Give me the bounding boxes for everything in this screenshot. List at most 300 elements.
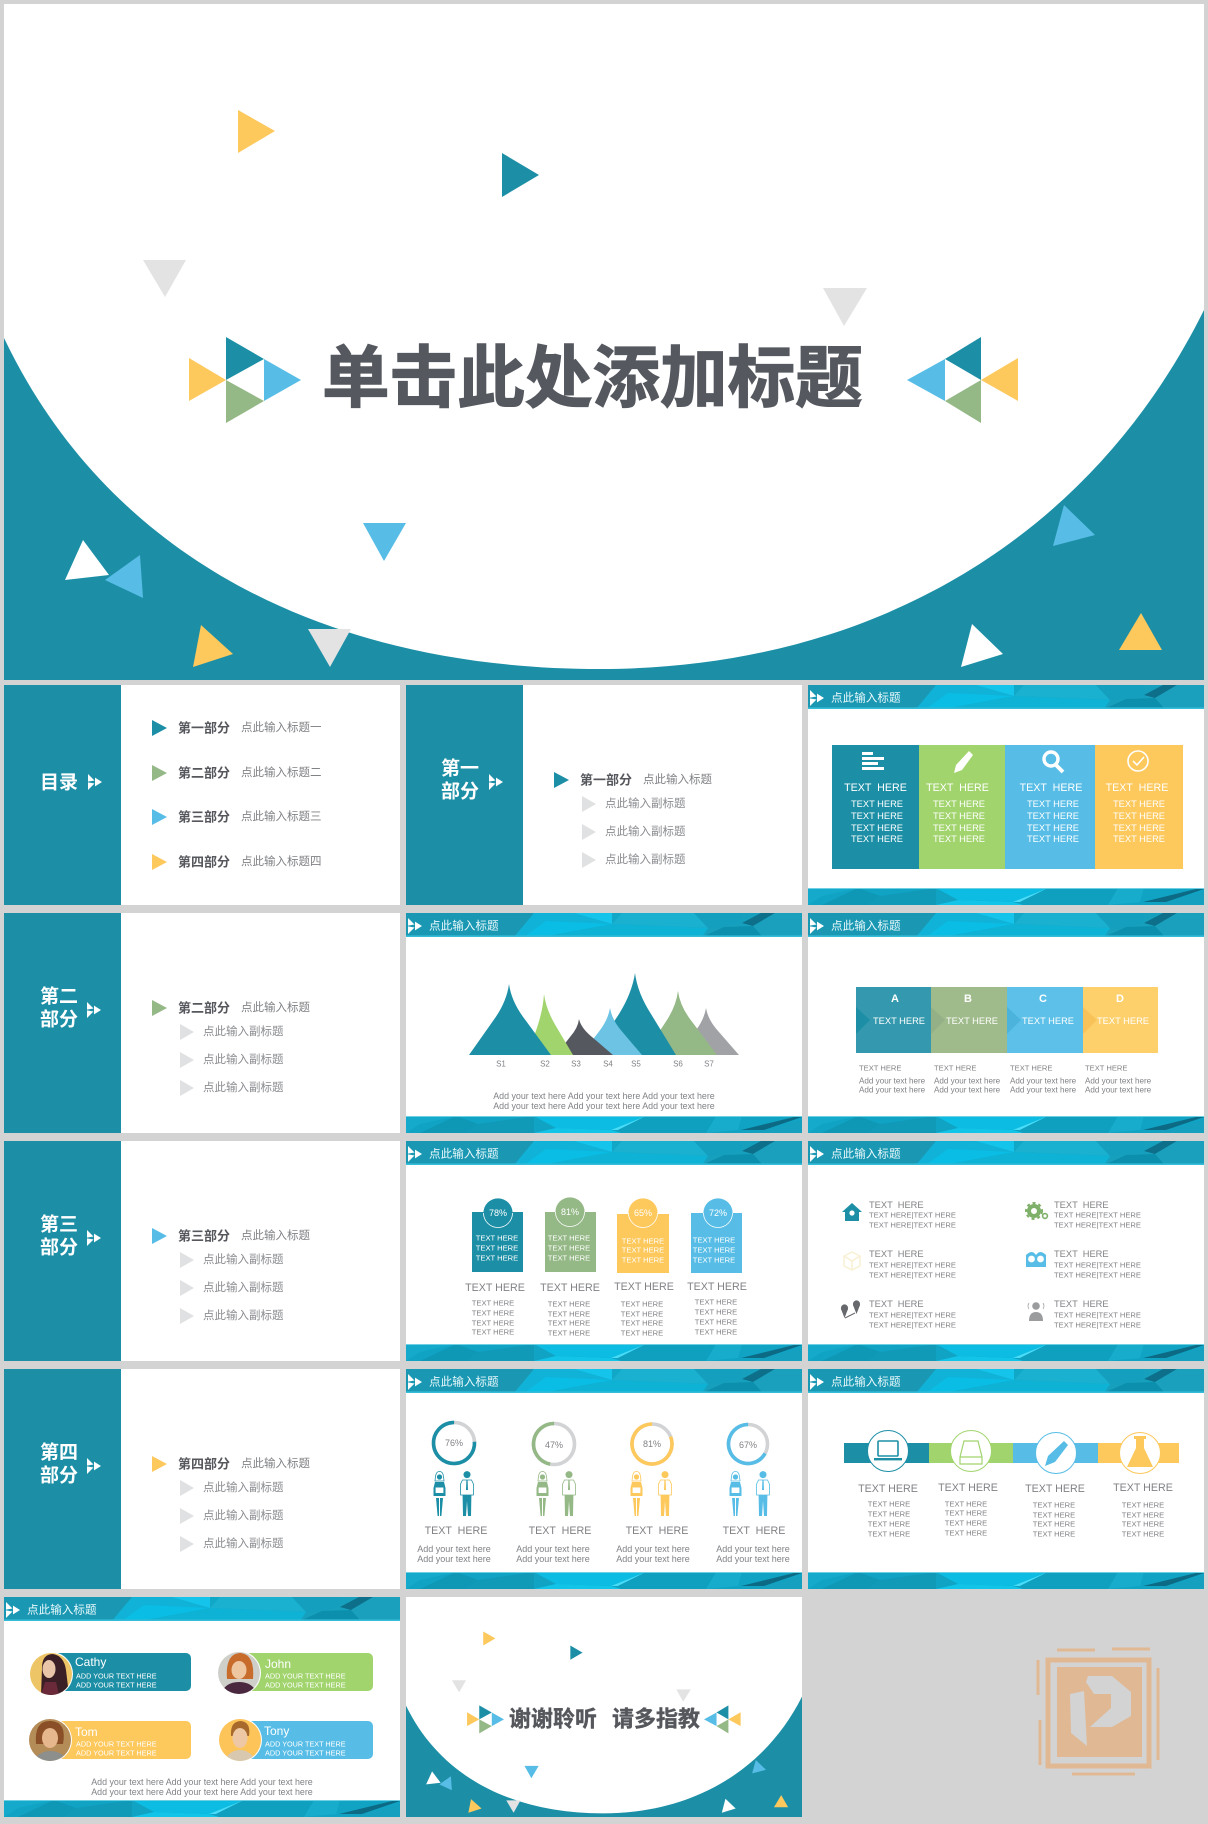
card: Tony: ADD YOUR TEXT HERE xyxy=(265,1740,346,1748)
header band xyxy=(808,1141,1204,1165)
slide background xyxy=(406,913,802,1133)
contents item 2 xyxy=(152,765,322,781)
subheading 1: 点此输入副标题 xyxy=(203,1252,284,1266)
subheading 2 xyxy=(180,1052,284,1068)
subheading 1: 点此输入副标题 xyxy=(203,1024,284,1038)
people icons yellow xyxy=(630,1471,671,1516)
icon: pencil xyxy=(1036,1432,1076,1474)
section heading: 点此输入标题 xyxy=(643,772,712,786)
section heading: 点此输入标题 xyxy=(241,1456,310,1470)
chart axis labels: S1 xyxy=(496,1060,506,1068)
header band xyxy=(406,1141,802,1165)
icon: person speaking xyxy=(1028,1302,1044,1321)
card: John: ADD YOUR TEXT HERE xyxy=(265,1672,346,1680)
avatar: John xyxy=(217,1651,261,1695)
item 3 text: TEXT HERE xyxy=(869,1249,924,1259)
sidebar: 部分 xyxy=(40,1236,78,1258)
description D: Add your text here xyxy=(1085,1086,1152,1094)
icon: cube xyxy=(844,1252,860,1270)
contents item 3: 点此输入标题三 xyxy=(241,809,322,823)
item 1 text: TEXT HERE|TEXT HERE xyxy=(869,1210,956,1220)
panel: four colour columns xyxy=(808,685,1204,905)
text column 1: TEXT HERE xyxy=(858,1483,918,1495)
header band: 点此输入标题 xyxy=(831,690,901,704)
subheading 1: 点此输入副标题 xyxy=(203,1480,284,1494)
section heading: 第四部分 xyxy=(178,1456,230,1472)
subheading 3 xyxy=(180,1308,284,1324)
chart axis labels: S5 xyxy=(631,1060,641,1068)
description A xyxy=(859,1064,926,1094)
column 3: TEXT HERE xyxy=(1027,799,1079,809)
icon: check circle xyxy=(1128,751,1148,771)
header band xyxy=(808,685,1204,709)
column 1: TEXT HERE xyxy=(844,782,907,794)
colour band xyxy=(844,1443,1179,1463)
text column 2: TEXT HERE xyxy=(548,1328,590,1338)
card 65%: TEXT HERE xyxy=(622,1256,664,1264)
card: Cathy xyxy=(29,1652,191,1696)
item 4 text: TEXT HERE|TEXT HERE xyxy=(1054,1270,1141,1280)
icon: flask xyxy=(1120,1432,1160,1474)
description B: Add your text here xyxy=(934,1086,1001,1094)
sidebar xyxy=(4,913,121,1133)
footer band xyxy=(406,1572,802,1589)
text column 1: TEXT HERE xyxy=(868,1510,910,1518)
text column 2: TEXT HERE xyxy=(945,1508,987,1518)
text column 2: TEXT HERE xyxy=(938,1482,998,1494)
footer band xyxy=(808,888,1204,905)
footer band xyxy=(808,1572,1204,1589)
panel: section three xyxy=(4,1141,400,1361)
people icons green xyxy=(536,1471,575,1516)
card: Tony: Tony xyxy=(264,1724,289,1738)
gauge 81% xyxy=(626,1418,678,1470)
text column 1: TEXT HERE xyxy=(472,1308,514,1318)
subheading 1: 点此输入副标题 xyxy=(605,796,686,810)
panel: timeline band xyxy=(808,1369,1204,1589)
panel: six icon list xyxy=(808,1141,1204,1361)
slide background xyxy=(808,685,1204,905)
column 1: TEXT HERE xyxy=(851,811,903,821)
sidebar: 第二 xyxy=(40,986,78,1008)
item 2 text: TEXT HERE|TEXT HERE xyxy=(1054,1210,1141,1220)
step B: B xyxy=(964,993,972,1005)
subheading 1 xyxy=(180,1252,284,1268)
step A: TEXT HERE xyxy=(873,1016,925,1026)
panel: contents slide xyxy=(4,685,400,905)
item 4 text: TEXT HERE xyxy=(1054,1249,1109,1259)
text column 4: TEXT HERE xyxy=(695,1308,737,1316)
section heading: 第三部分 xyxy=(178,1228,230,1244)
card 78%: TEXT HERE xyxy=(476,1254,518,1262)
text column 2 xyxy=(516,1525,591,1564)
header band: 点此输入标题 xyxy=(27,1602,97,1616)
text column 2: TEXT HERE xyxy=(945,1528,987,1538)
sidebar xyxy=(4,1369,121,1589)
caption: Add your text here Add your text here Add your text here xyxy=(493,1091,715,1101)
contents item 3: 第三部分 xyxy=(178,810,230,824)
footer band xyxy=(406,1344,802,1361)
description A: Add your text here xyxy=(859,1076,926,1086)
caption: Add your text here Add your text here Add your text here xyxy=(91,1787,313,1797)
contents item 1: 第一部分 xyxy=(178,720,230,736)
chart axis labels: S3 xyxy=(571,1060,581,1068)
text column 2: TEXT HERE xyxy=(945,1518,987,1528)
text column 4: TEXT HERE xyxy=(695,1318,737,1326)
text column 1 xyxy=(417,1525,491,1564)
text column 4 xyxy=(1113,1482,1173,1538)
chart axis labels: S2 xyxy=(540,1060,550,1068)
subheading 3 xyxy=(180,1536,284,1552)
gauge 76% xyxy=(432,1421,476,1465)
column 4: TEXT HERE xyxy=(1113,823,1165,833)
header band xyxy=(4,1597,400,1621)
text column 1: TEXT HERE xyxy=(472,1298,514,1308)
item 4 text xyxy=(1054,1249,1141,1280)
description B: TEXT HERE xyxy=(934,1064,976,1072)
item 4 text: TEXT HERE|TEXT HERE xyxy=(1054,1260,1141,1270)
text column 3: Add your text here xyxy=(616,1544,690,1554)
slide background xyxy=(4,1369,400,1589)
subheading 3: 点此输入副标题 xyxy=(203,1080,284,1094)
subheading 3: 点此输入副标题 xyxy=(203,1536,284,1550)
description A: Add your text here xyxy=(859,1086,926,1094)
card 78%: TEXT HERE xyxy=(476,1244,518,1252)
item 3 text xyxy=(869,1249,956,1280)
contents item 4 xyxy=(152,854,322,870)
text column 1: TEXT HERE xyxy=(868,1500,910,1508)
text column 4: TEXT HERE xyxy=(1122,1530,1164,1538)
column 3: TEXT HERE xyxy=(1027,811,1079,821)
panel: team xyxy=(4,1597,400,1817)
panel: peak chart xyxy=(406,913,802,1133)
text column 1 xyxy=(465,1282,525,1336)
column 2 xyxy=(919,745,1005,869)
sidebar: 第四 xyxy=(40,1442,78,1464)
text column 3 xyxy=(614,1281,674,1338)
watermark stamp xyxy=(1038,1649,1158,1774)
item 5 text: TEXT HERE|TEXT HERE xyxy=(869,1320,956,1330)
header band: 点此输入标题 xyxy=(429,1374,499,1388)
card: Tom: ADD YOUR TEXT HERE xyxy=(76,1740,157,1748)
text column 1: Add your text here xyxy=(417,1544,491,1554)
card 78%: 78% xyxy=(489,1208,507,1218)
sidebar: 第三 xyxy=(40,1214,78,1236)
text column 3 xyxy=(1025,1483,1085,1538)
thank you title xyxy=(509,1706,700,1732)
item 6 text: TEXT HERE xyxy=(1054,1299,1109,1309)
chart axis labels: S6 xyxy=(673,1060,683,1068)
column 1: TEXT HERE xyxy=(851,834,903,844)
sidebar xyxy=(406,685,523,905)
text column 3 xyxy=(616,1525,690,1564)
text column 2: TEXT HERE xyxy=(548,1318,590,1328)
header band: 点此输入标题 xyxy=(429,1146,499,1160)
text column 4: TEXT HERE xyxy=(1113,1482,1173,1494)
people icons teal xyxy=(434,1471,473,1516)
step C xyxy=(1007,987,1083,1053)
sidebar: 部分 xyxy=(40,1464,78,1486)
contents item 1 xyxy=(152,720,322,736)
subheading 2: 点此输入副标题 xyxy=(203,1052,284,1066)
card: Cathy: ADD YOUR TEXT HERE xyxy=(76,1680,157,1690)
subheading 1 xyxy=(180,1480,284,1496)
thank you title: 谢谢聆听 xyxy=(509,1706,597,1732)
subheading 2: 点此输入副标题 xyxy=(203,1280,284,1294)
gauge 67%: 67% xyxy=(739,1440,757,1450)
header band: 点此输入标题 xyxy=(429,918,499,932)
item 1 text: TEXT HERE|TEXT HERE xyxy=(869,1220,956,1230)
gauge 81%: 81% xyxy=(643,1439,661,1449)
card 78%: TEXT HERE xyxy=(476,1234,518,1242)
thank you title: 请多指教 xyxy=(612,1706,700,1732)
card 72%: 72% xyxy=(709,1208,727,1218)
description C: Add your text here xyxy=(1010,1076,1077,1086)
slide background xyxy=(808,1369,1204,1589)
item 6 text: TEXT HERE|TEXT HERE xyxy=(1054,1320,1141,1330)
section heading: 点此输入标题 xyxy=(241,1228,310,1242)
footer band xyxy=(4,1800,400,1817)
text column 2: Add your text here xyxy=(516,1544,590,1554)
panel: section one xyxy=(406,685,802,905)
column 4 xyxy=(1095,745,1183,869)
step B: TEXT HERE xyxy=(946,1016,998,1026)
section heading: 点此输入标题 xyxy=(241,1000,310,1014)
subheading 2 xyxy=(180,1508,284,1524)
text column 1: TEXT HERE xyxy=(472,1318,514,1328)
text column 2: TEXT HERE xyxy=(548,1300,590,1308)
contents item 1: 点此输入标题一 xyxy=(241,720,322,734)
slide background xyxy=(406,685,802,905)
text column 3: TEXT HERE xyxy=(621,1328,663,1338)
item 5 text xyxy=(869,1299,956,1330)
text column 4: TEXT HERE xyxy=(723,1525,785,1537)
subheading 2 xyxy=(582,824,686,840)
text column 1: TEXT HERE xyxy=(868,1530,910,1538)
description B: Add your text here xyxy=(934,1076,1001,1086)
description A: TEXT HERE xyxy=(859,1064,901,1072)
panel: percentage cards xyxy=(406,1141,802,1361)
card: Cathy: Cathy xyxy=(75,1655,106,1669)
panel: section two xyxy=(4,913,400,1133)
caption: Add your text here Add your text here Add your text here xyxy=(91,1777,313,1787)
section heading xyxy=(152,1228,310,1244)
panel: section four xyxy=(4,1369,400,1589)
text column 4: TEXT HERE xyxy=(695,1328,737,1336)
text column 2: TEXT HERE xyxy=(529,1525,591,1537)
card: John xyxy=(217,1651,373,1695)
subheading 2: 点此输入副标题 xyxy=(605,824,686,838)
item 3 text: TEXT HERE|TEXT HERE xyxy=(869,1260,956,1270)
card: Tom: ADD YOUR TEXT HERE xyxy=(76,1748,157,1758)
description C: Add your text here xyxy=(1010,1086,1077,1094)
text column 1: TEXT HERE xyxy=(472,1328,514,1336)
avatar: Tony xyxy=(218,1718,262,1762)
card 72%: TEXT HERE xyxy=(693,1236,735,1244)
card 72% xyxy=(691,1198,742,1273)
text column 3: TEXT HERE xyxy=(614,1281,674,1293)
subheading 3 xyxy=(180,1080,284,1096)
sidebar: 部分 xyxy=(40,1008,78,1030)
card 78% xyxy=(472,1198,523,1272)
sidebar: 目录 xyxy=(40,772,78,794)
text column 4: Add your text here xyxy=(716,1544,790,1554)
avatar: Tom xyxy=(28,1718,72,1762)
icon: gears xyxy=(1026,1203,1047,1219)
sidebar: 部分 xyxy=(441,780,479,802)
header band: 点此输入标题 xyxy=(831,918,901,932)
description C: TEXT HERE xyxy=(1010,1064,1052,1072)
contents item 4: 点此输入标题四 xyxy=(241,854,322,868)
text column 4 xyxy=(687,1281,747,1336)
panel: ring gauges with people xyxy=(406,1369,802,1589)
subheading 1 xyxy=(180,1024,284,1040)
header band xyxy=(406,1369,802,1393)
card 81%: TEXT HERE xyxy=(548,1244,590,1252)
card 65% xyxy=(617,1198,669,1273)
item 3 text: TEXT HERE|TEXT HERE xyxy=(869,1270,956,1280)
header band xyxy=(808,913,1204,937)
step C: TEXT HERE xyxy=(1022,1016,1074,1026)
text column 2 xyxy=(540,1282,600,1338)
column 2: TEXT HERE xyxy=(926,782,989,794)
text column 3: TEXT HERE xyxy=(1025,1483,1085,1495)
section heading: 第一部分 xyxy=(580,772,632,788)
icon: laptop xyxy=(868,1430,908,1472)
text column 1 xyxy=(858,1483,918,1538)
item 1 text xyxy=(869,1200,956,1230)
footer band xyxy=(406,1116,802,1133)
section heading xyxy=(554,772,712,788)
card: Tony xyxy=(218,1718,373,1762)
description D xyxy=(1085,1064,1152,1094)
column 2: TEXT HERE xyxy=(933,811,985,821)
contents item 3 xyxy=(152,809,322,825)
subheading 3 xyxy=(582,852,686,868)
card 81%: 81% xyxy=(561,1207,579,1217)
text column 3: TEXT HERE xyxy=(621,1310,663,1318)
icon: house xyxy=(842,1203,862,1221)
text column 4: TEXT HERE xyxy=(1122,1500,1164,1510)
step D: D xyxy=(1116,993,1124,1005)
item 2 text xyxy=(1054,1200,1141,1230)
gauge 76%: 76% xyxy=(445,1438,463,1448)
text column 2: TEXT HERE xyxy=(945,1500,987,1508)
caption: Add your text here Add your text here Add your text here xyxy=(493,1101,715,1111)
text column 1: TEXT HERE xyxy=(868,1520,910,1528)
card 65%: TEXT HERE xyxy=(622,1236,664,1246)
item 5 text: TEXT HERE|TEXT HERE xyxy=(869,1310,956,1320)
subheading 1 xyxy=(582,796,686,812)
column 4: TEXT HERE xyxy=(1113,834,1165,844)
text column 1: Add your text here xyxy=(417,1554,491,1564)
text column 4: TEXT HERE xyxy=(1122,1510,1164,1520)
card 65%: 65% xyxy=(634,1208,652,1218)
panel: ABCD process xyxy=(808,913,1204,1133)
column 2: TEXT HERE xyxy=(933,823,985,833)
text column 2 xyxy=(938,1482,998,1538)
chart axis labels: S4 xyxy=(603,1060,613,1068)
card 81%: TEXT HERE xyxy=(548,1234,590,1242)
card: John: John xyxy=(265,1657,291,1671)
card: Tony: ADD YOUR TEXT HERE xyxy=(265,1748,346,1758)
header band xyxy=(808,1369,1204,1393)
column 3 xyxy=(1005,745,1095,869)
text column 1: TEXT HERE xyxy=(425,1525,487,1537)
step D: TEXT HERE xyxy=(1097,1016,1149,1026)
caption xyxy=(91,1777,313,1797)
text column 3: TEXT HERE xyxy=(621,1318,663,1328)
slide background xyxy=(4,685,400,905)
footer band xyxy=(808,1344,1204,1361)
sidebar xyxy=(4,685,121,905)
subheading 3: 点此输入副标题 xyxy=(203,1308,284,1322)
item 1 text: TEXT HERE xyxy=(869,1200,924,1210)
hero background scaled xyxy=(406,1597,802,1817)
text column 1: TEXT HERE xyxy=(465,1282,525,1294)
slide background xyxy=(808,1141,1204,1361)
item 2 text: TEXT HERE|TEXT HERE xyxy=(1054,1220,1141,1230)
text column 4: TEXT HERE xyxy=(695,1298,737,1306)
text column 3: TEXT HERE xyxy=(1033,1520,1075,1528)
item 5 text: TEXT HERE xyxy=(869,1299,924,1309)
gauge 47% xyxy=(530,1420,578,1468)
column 3: TEXT HERE xyxy=(1027,823,1079,833)
step C: C xyxy=(1039,993,1047,1005)
step D xyxy=(1083,987,1158,1053)
text column 3: Add your text here xyxy=(616,1554,690,1564)
text column 4: TEXT HERE xyxy=(1122,1520,1164,1528)
column 3: TEXT HERE xyxy=(1020,782,1082,794)
text column 2: Add your text here xyxy=(516,1554,590,1564)
avatar: Cathy xyxy=(29,1652,73,1696)
description D: TEXT HERE xyxy=(1085,1064,1127,1072)
watermark letter shape xyxy=(1070,1676,1131,1746)
card: John: ADD YOUR TEXT HERE xyxy=(265,1680,346,1690)
contents item 2: 点此输入标题二 xyxy=(241,765,322,779)
step A xyxy=(856,987,931,1053)
description B xyxy=(934,1064,1001,1094)
item 2 text: TEXT HERE xyxy=(1054,1200,1109,1210)
hero curved background and triangles xyxy=(4,4,1204,680)
card 81% xyxy=(545,1197,596,1272)
header band xyxy=(406,913,802,937)
subheading 2 xyxy=(180,1280,284,1296)
slide background xyxy=(4,1597,400,1817)
mountain chart xyxy=(469,973,739,1055)
step B xyxy=(931,987,1007,1053)
header band: 点此输入标题 xyxy=(831,1146,901,1160)
item 6 text xyxy=(1054,1299,1141,1330)
contents item 2: 第二部分 xyxy=(178,766,230,780)
footer band xyxy=(808,1116,1204,1133)
contents item 4: 第四部分 xyxy=(178,854,230,870)
section heading xyxy=(152,1000,310,1016)
icon: text lines xyxy=(862,752,884,770)
column 1: TEXT HERE xyxy=(851,799,903,809)
title: 单击此处添加标题 xyxy=(322,342,863,416)
card: Cathy: ADD YOUR TEXT HERE xyxy=(76,1672,157,1680)
chart axis labels: S7 xyxy=(704,1060,714,1068)
column 4: TEXT HERE xyxy=(1113,799,1165,809)
text column 3: TEXT HERE xyxy=(626,1525,688,1537)
people icons blue xyxy=(730,1471,769,1516)
subheading 2: 点此输入副标题 xyxy=(203,1508,284,1522)
slide background xyxy=(406,1369,802,1589)
caption xyxy=(493,1091,715,1111)
icon: pencil xyxy=(954,751,973,773)
chart axis labels xyxy=(496,1060,714,1068)
